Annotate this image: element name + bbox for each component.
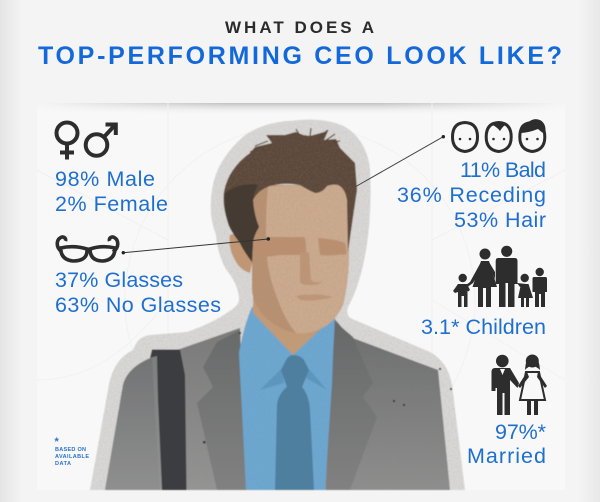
face shadow side (252, 185, 349, 333)
hair (224, 131, 357, 262)
footnote: BASED ON (55, 447, 86, 453)
block: glasses (55, 237, 221, 317)
glasses stats (55, 268, 221, 317)
paper cut-out halo (90, 120, 465, 490)
hair stats (397, 158, 546, 232)
gender stats: 2% Female (55, 192, 168, 216)
callout line: glasses (122, 237, 270, 254)
callout line: hair (355, 135, 445, 187)
footnote: * (54, 436, 60, 448)
mouth (296, 294, 333, 301)
illustration: CEO portrait (90, 120, 465, 490)
jacket left (105, 328, 246, 490)
hair stats: 11% Bald (460, 158, 546, 182)
footnote (54, 436, 89, 467)
neck (253, 285, 332, 355)
ear (230, 234, 253, 273)
glasses stats: 63% No Glasses (55, 293, 221, 317)
icon: full hair face (519, 119, 546, 152)
footnote: DATA (55, 461, 71, 467)
shirt (239, 307, 335, 490)
icon: bride and groom (492, 355, 547, 415)
married stat: Married (467, 444, 546, 468)
icon: female symbol (56, 122, 78, 160)
title line two: TOP-PERFORMING CEO LOOK LIKE? (38, 42, 562, 70)
hair strands (250, 128, 340, 152)
title (38, 18, 562, 70)
block: married (467, 355, 547, 468)
gender stats (55, 167, 168, 216)
right eye band (318, 238, 347, 255)
block: children (421, 246, 547, 339)
lapel left (197, 330, 246, 490)
hair stats: 53% Hair (454, 208, 546, 232)
block: hair (397, 119, 546, 232)
title line one: WHAT DOES A (225, 18, 374, 37)
icon: glasses (57, 237, 118, 261)
hair dark side (225, 184, 259, 262)
jacket specks (203, 332, 452, 444)
footnote: AVAILABLE (55, 454, 89, 460)
icon: male symbol (86, 124, 116, 156)
collar shadows (260, 368, 327, 390)
panel: portrait background (37, 103, 565, 490)
children stat: 3.1* Children (421, 315, 546, 339)
lapel right (326, 320, 377, 490)
jacket left dark sleeve (105, 358, 160, 490)
face light area (266, 185, 349, 333)
block: gender (55, 122, 168, 216)
left eye band (253, 237, 306, 256)
tie (275, 355, 314, 490)
glasses stats: 37% Glasses (55, 268, 183, 292)
bag strap (150, 350, 186, 490)
jacket right (325, 317, 450, 490)
icon: receding hair face (486, 122, 511, 152)
nose shadow (300, 252, 323, 285)
gender stats: 98% Male (55, 167, 155, 191)
icon: bald face (452, 122, 478, 152)
hair stats: 36% Receding (397, 183, 546, 207)
married stat (467, 420, 547, 468)
married stat: 97%* (495, 420, 547, 444)
icon: family (453, 246, 547, 307)
